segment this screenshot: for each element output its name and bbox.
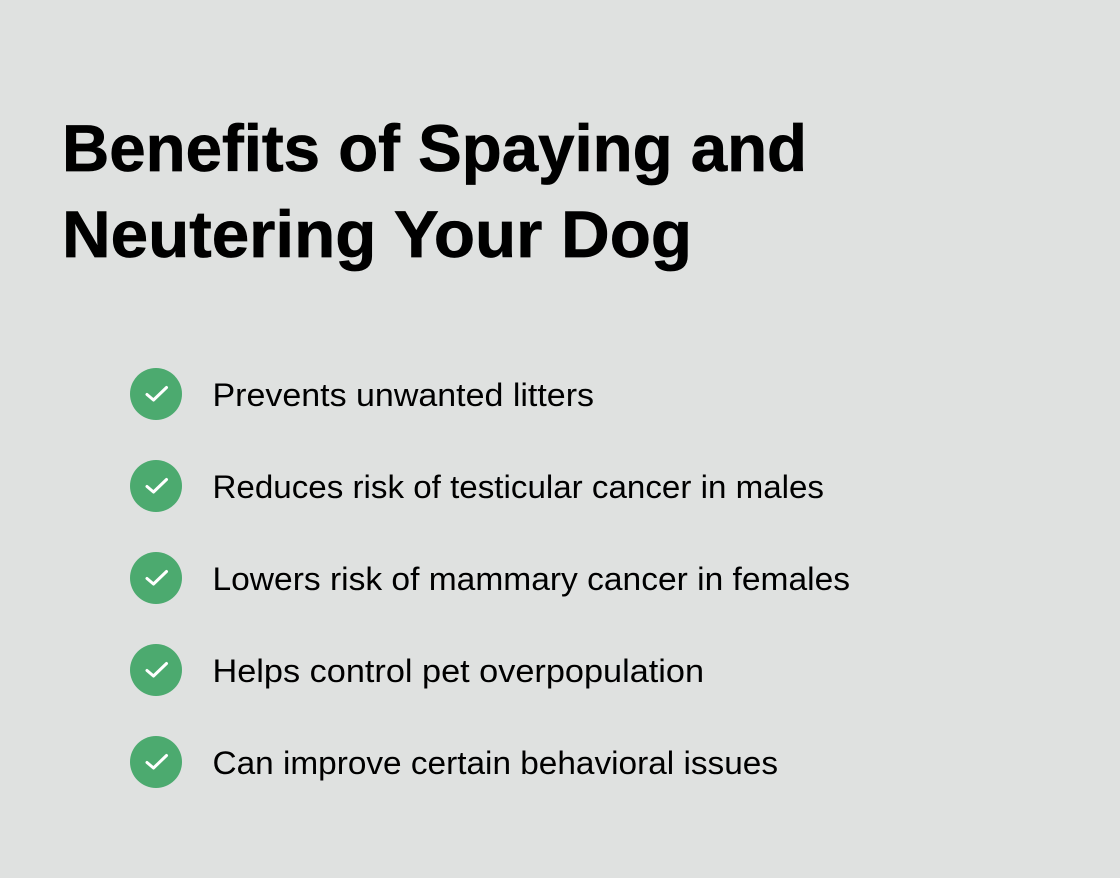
item: lowers risk of mammary cancer — [130, 552, 850, 604]
benefits list — [130, 368, 850, 788]
item: lowers risk of mammary cancer: Lowers risk of mammary cancer in females — [212, 561, 850, 597]
item: prevents unwanted litters — [130, 368, 594, 420]
item: prevents unwanted litters: Prevents unwanted litters — [212, 377, 594, 413]
item: helps control pet overpopulation: Helps control pet overpopulation — [212, 653, 704, 689]
title: Benefits of Spaying and — [62, 111, 807, 185]
item: helps control pet overpopulation — [130, 644, 704, 696]
title — [62, 111, 807, 271]
item: reduces risk of testicular cancer: Reduces risk of testicular cancer in males — [212, 469, 824, 505]
title: Neutering Your Dog — [62, 197, 692, 271]
item: reduces risk of testicular cancer — [130, 460, 824, 512]
item: can improve behavioral issues: Can improve certain behavioral issues — [212, 745, 778, 781]
item: can improve behavioral issues — [130, 736, 778, 788]
